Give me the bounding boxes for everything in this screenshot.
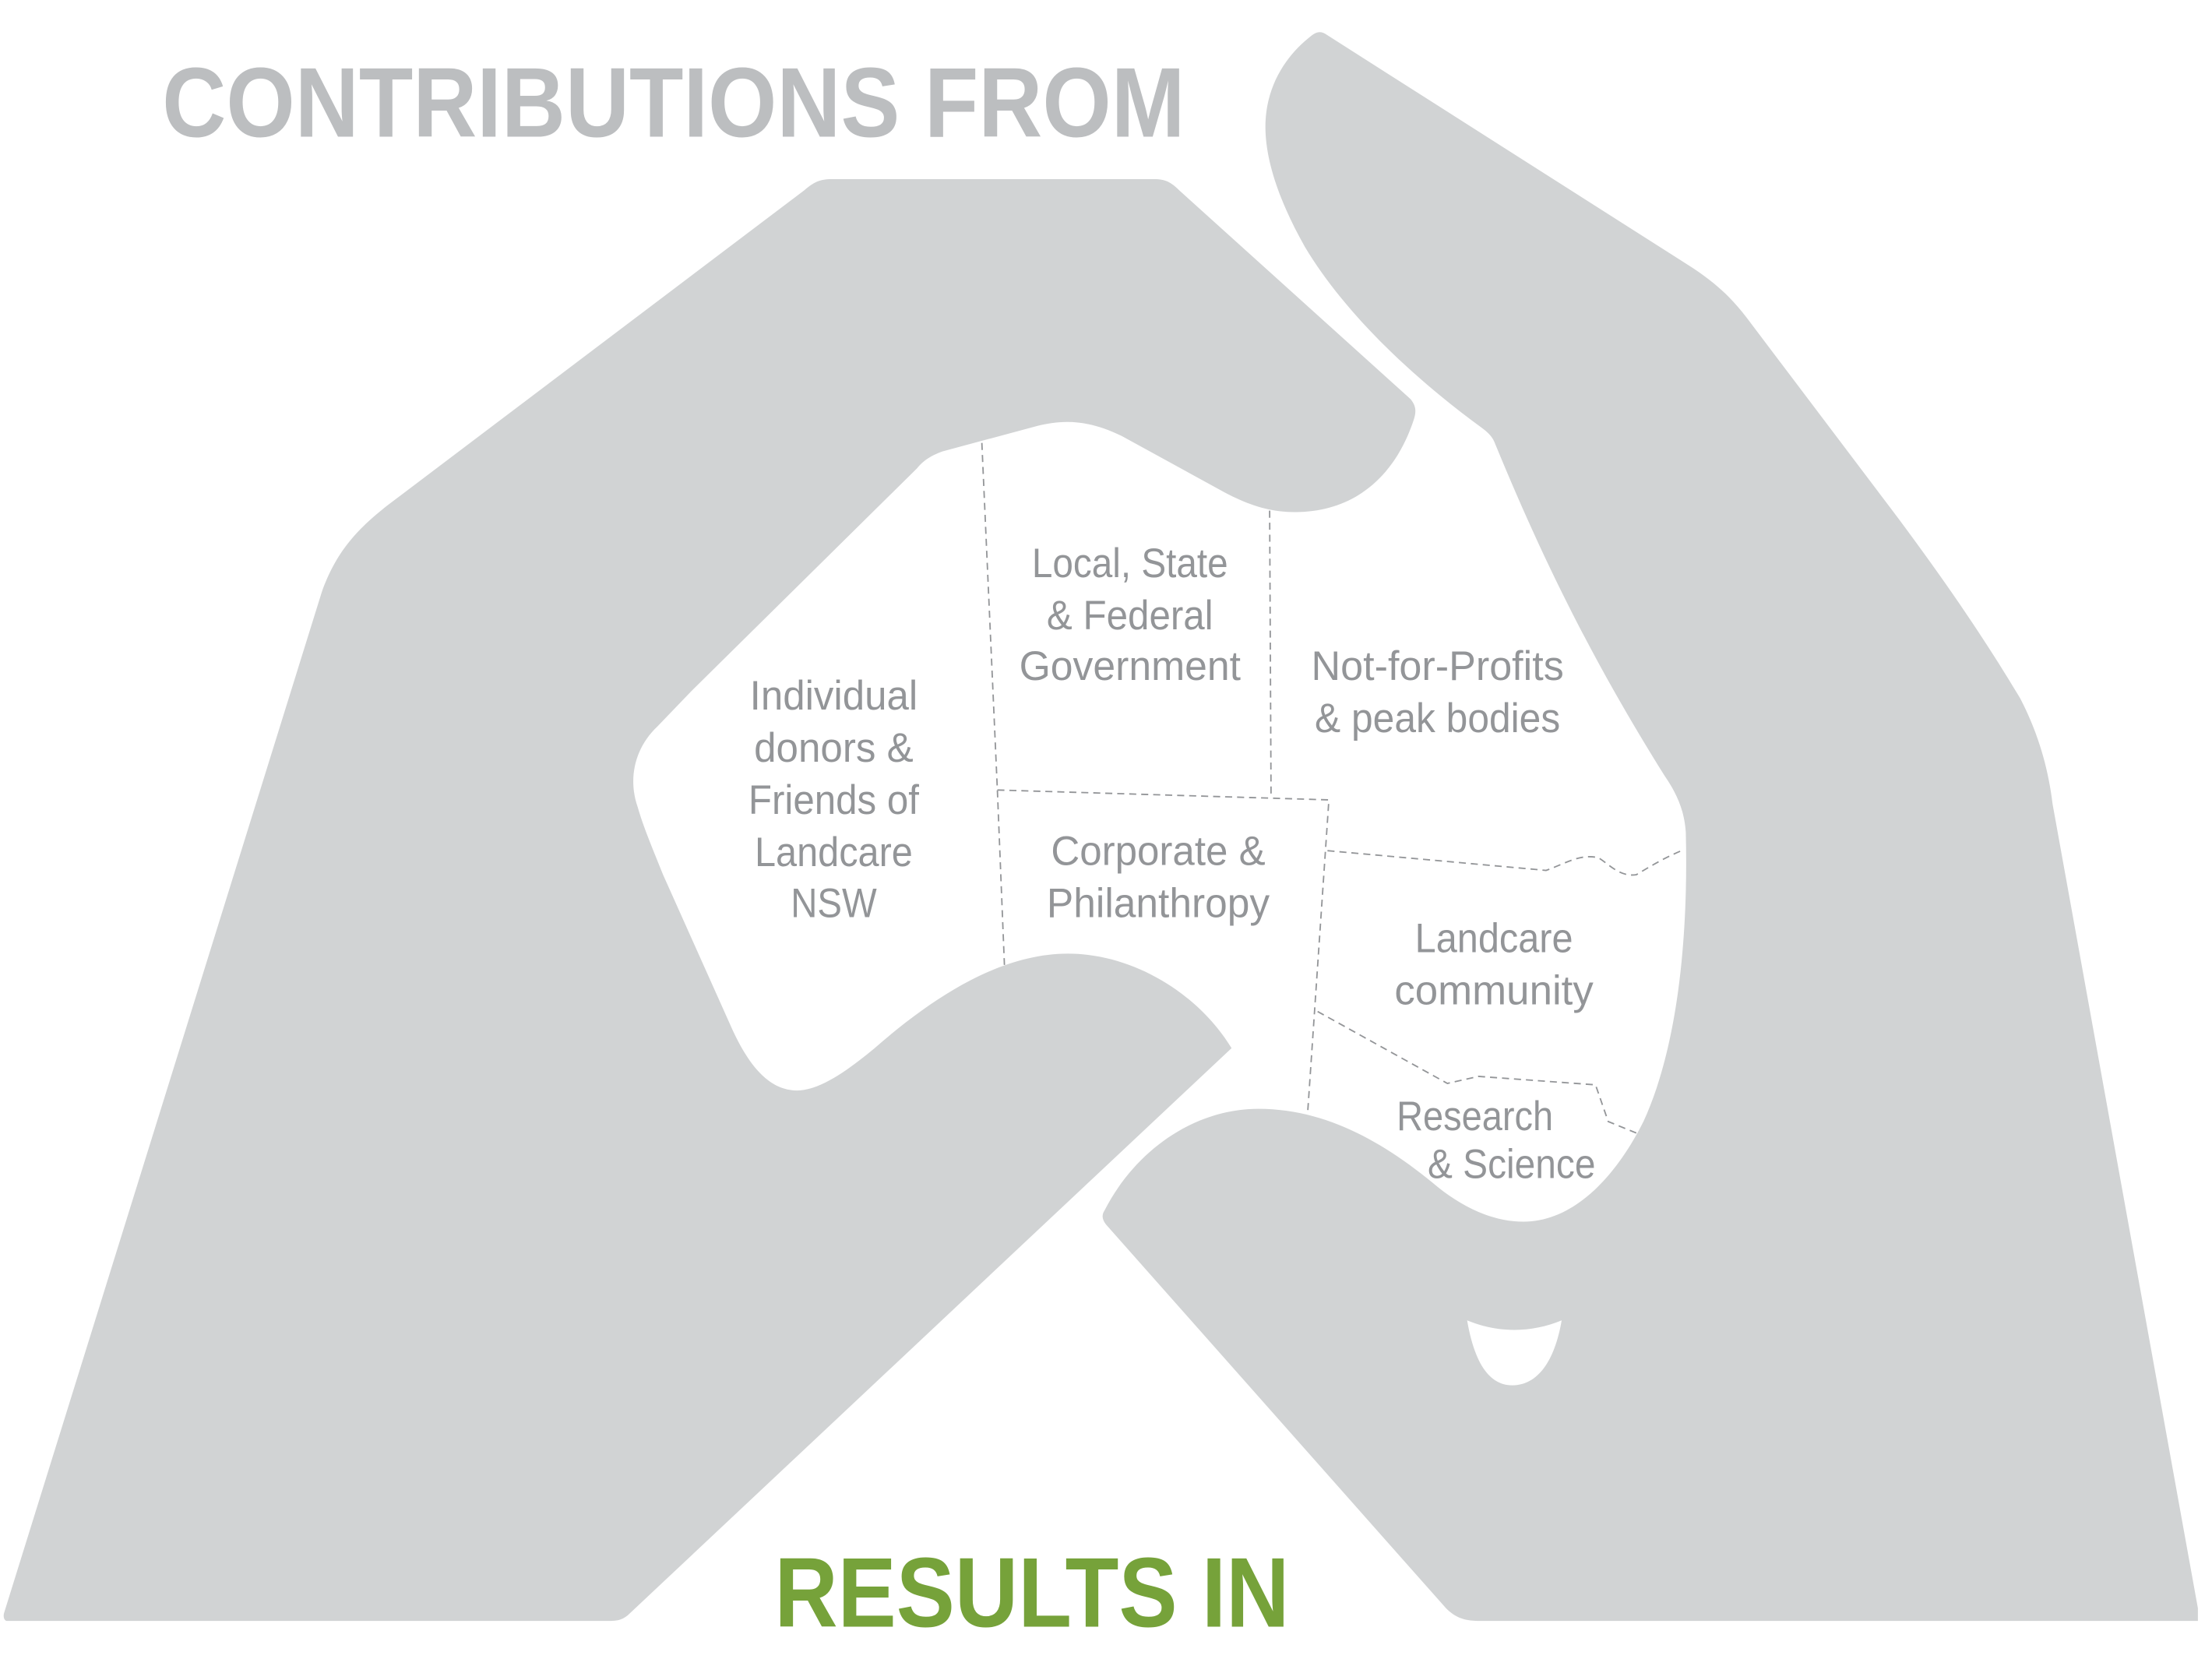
label: not-for-profits: Not-for-Profits: [1312, 643, 1564, 689]
label: research and science: & Science: [1428, 1141, 1595, 1187]
label: government: Government: [1020, 643, 1241, 689]
left hand: [4, 179, 1415, 1621]
label: individual donors: NSW: [791, 880, 877, 926]
label: research and science: Research: [1397, 1094, 1553, 1139]
label: individual donors: [748, 673, 919, 926]
heading: results in: RESULTS IN: [774, 1537, 1289, 1647]
label: government: & Federal: [1047, 593, 1213, 639]
label: corporate: Corporate &: [1051, 828, 1266, 874]
label: government: [1020, 541, 1241, 689]
label: research and science: [1397, 1094, 1595, 1187]
label: landcare community: community: [1394, 968, 1594, 1014]
label: landcare community: Landcare: [1415, 916, 1573, 962]
label: government: Local, State: [1032, 541, 1228, 586]
label: not-for-profits: & peak bodies: [1315, 696, 1560, 741]
dashed state borders of the map: [982, 443, 1682, 1134]
label: individual donors: Landcare: [755, 830, 913, 875]
label: corporate: Philanthropy: [1047, 880, 1270, 926]
right hand with gap between fingers: [1103, 32, 2198, 1621]
label: individual donors: Individual: [750, 673, 918, 719]
label: individual donors: Friends of: [748, 777, 919, 823]
label: landcare community: [1394, 916, 1594, 1014]
label: individual donors: donors &: [754, 725, 914, 771]
label: corporate: [1047, 828, 1270, 926]
title: contributions from: CONTRIBUTIONS FROM: [162, 48, 1185, 158]
label: not-for-profits: [1312, 643, 1564, 741]
